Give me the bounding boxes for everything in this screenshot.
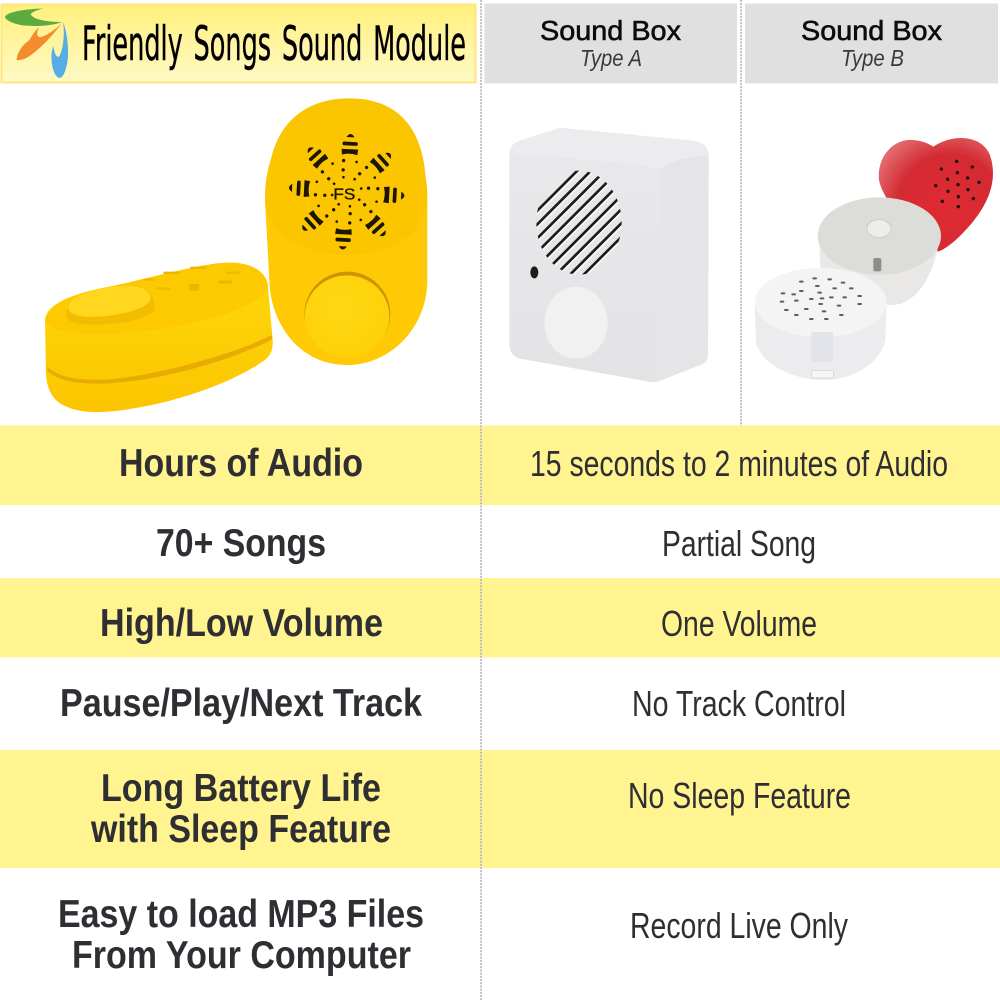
row: battery and sleep: Long Battery Life <box>101 767 381 810</box>
speaker grille <box>536 170 622 274</box>
row: battery and sleep <box>90 767 851 851</box>
icon: Friendly Songs logo <box>5 8 68 78</box>
grey round box <box>818 197 941 305</box>
header: Friendly Songs Sound Module <box>2 4 476 82</box>
push button <box>544 287 608 359</box>
row: volume: One Volume <box>661 603 817 644</box>
row: volume <box>100 602 817 645</box>
row: loading audio: From Your Computer <box>72 934 411 977</box>
row: battery and sleep: No Sleep Feature <box>628 775 851 816</box>
lying module <box>45 263 273 412</box>
title text: Friendly Songs Sound Module <box>82 17 466 72</box>
FS label: FS <box>333 187 355 204</box>
row: loading audio: Record Live Only <box>630 905 848 946</box>
row: hours of audio <box>119 442 948 485</box>
row: loading audio: Easy to load MP3 Files <box>58 893 424 936</box>
table row bands <box>0 426 1000 868</box>
red heart box <box>879 138 993 252</box>
header: Sound Box Type A: Type A <box>580 45 642 71</box>
row: track control <box>60 682 846 725</box>
column dividers <box>481 0 741 1000</box>
microphone hole <box>530 266 538 278</box>
header: Sound Box Type A: Sound Box <box>540 15 681 46</box>
white round speaker box <box>755 268 887 380</box>
lying button <box>66 285 154 325</box>
header: Sound Box Type A <box>484 4 737 84</box>
row: hours of audio: Hours of Audio <box>119 442 363 485</box>
row: battery and sleep: with Sleep Feature <box>90 808 391 851</box>
row: loading audio <box>58 893 848 977</box>
row: track control: No Track Control <box>632 683 846 724</box>
speaker pattern <box>286 131 407 253</box>
upright module <box>265 98 427 365</box>
row: volume: High/Low Volume <box>100 602 383 645</box>
row: songs: 70+ Songs <box>156 522 326 565</box>
header: Sound Box Type B <box>745 4 998 84</box>
header: Sound Box Type B: Type B <box>841 45 904 71</box>
button <box>304 272 390 357</box>
lying speaker perforations <box>143 267 240 291</box>
product photo: white Sound Box Type A <box>509 118 709 382</box>
row: songs: Partial Song <box>662 523 816 564</box>
product photo: yellow Friendly Songs modules <box>45 98 427 412</box>
product photo: Sound Box Type B set <box>755 138 993 380</box>
header: Sound Box Type B: Sound Box <box>801 15 942 46</box>
row: songs <box>156 522 816 565</box>
row: track control: Pause/Play/Next Track <box>60 682 422 725</box>
